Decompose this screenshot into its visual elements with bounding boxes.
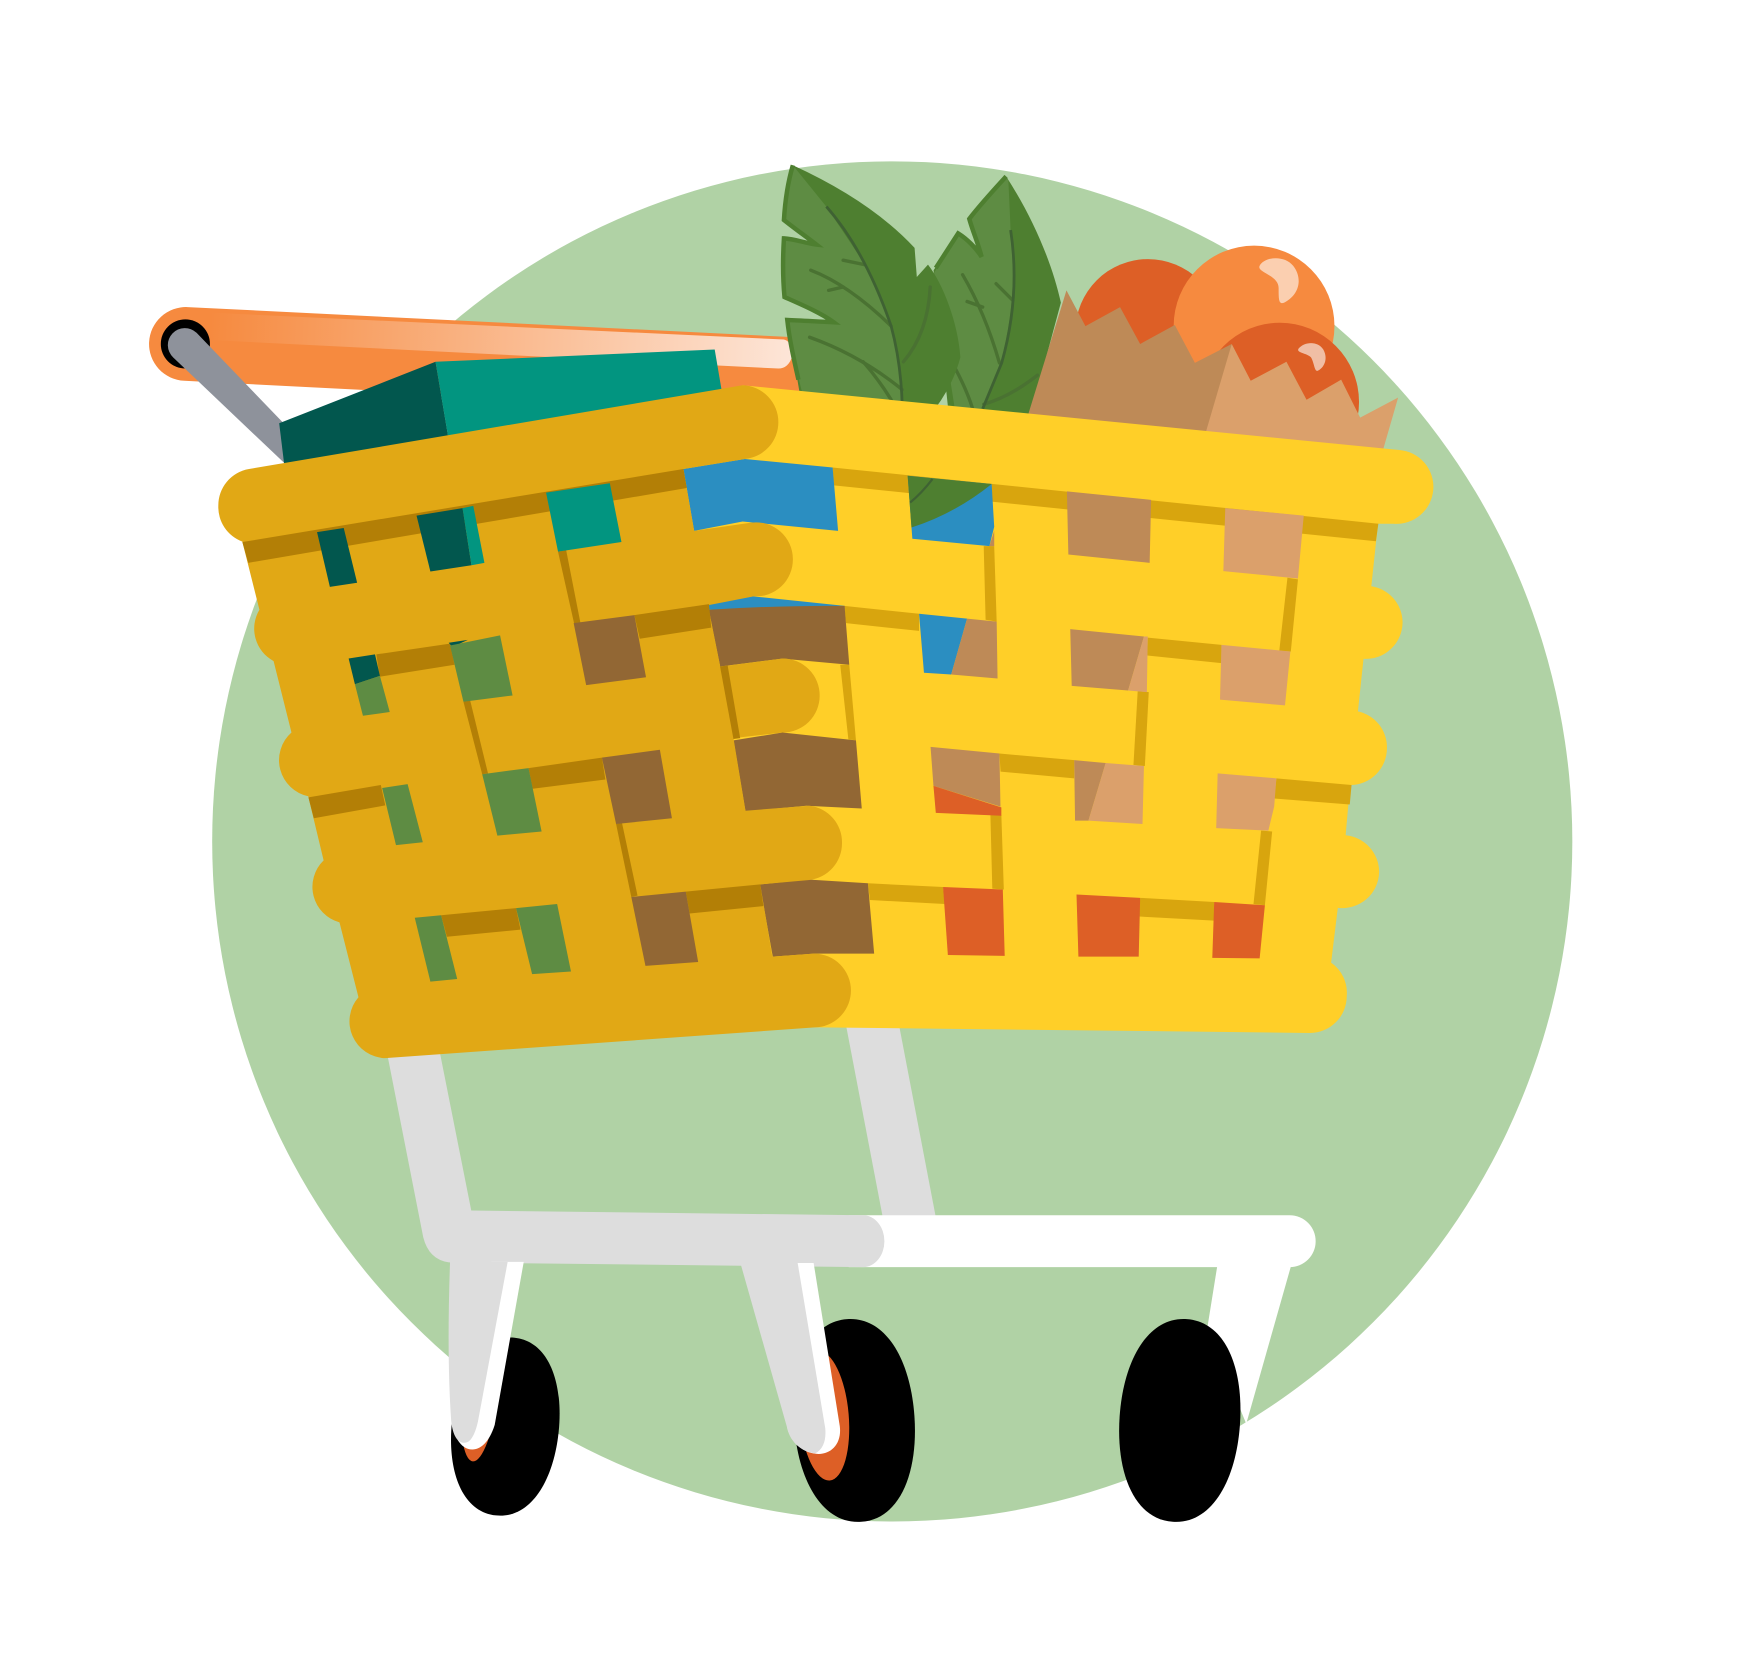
front orange bbox=[1174, 246, 1334, 406]
row three windows bbox=[734, 733, 1276, 831]
background circle bbox=[212, 161, 1572, 1521]
handle hole bbox=[161, 319, 210, 369]
white base bar bbox=[849, 1215, 1316, 1267]
yellow body bbox=[670, 385, 1433, 1033]
fruit and paper bags bbox=[1025, 246, 1398, 481]
row two windows bbox=[708, 596, 1290, 705]
red fruit bbox=[1200, 323, 1359, 481]
red fruit highlight bbox=[1298, 343, 1326, 371]
orange highlight bbox=[1259, 258, 1299, 303]
right white leg bbox=[1207, 1266, 1291, 1424]
left row three windows bbox=[382, 750, 672, 845]
basket windows on right side bbox=[683, 459, 1304, 958]
left row four windows bbox=[415, 892, 698, 982]
right leaf bbox=[934, 176, 1061, 419]
basket right side bbox=[670, 385, 1433, 1033]
basket left side bbox=[218, 385, 851, 1058]
cart back post bbox=[845, 1022, 936, 1217]
wheel middle bbox=[787, 1315, 922, 1526]
blue and leaf window bbox=[908, 476, 994, 546]
middle leg bbox=[740, 1263, 840, 1454]
left row two windows bbox=[349, 615, 646, 716]
wheel right bbox=[1113, 1315, 1247, 1526]
handle highlight bbox=[210, 313, 792, 369]
left leg bbox=[449, 1262, 524, 1449]
left leaf bbox=[783, 165, 960, 419]
book bbox=[279, 350, 724, 469]
gold body bbox=[218, 385, 851, 1058]
blue package window bbox=[683, 459, 838, 531]
right paper bag bbox=[1202, 344, 1398, 463]
row four windows bbox=[760, 880, 1265, 958]
tan windows bbox=[1067, 491, 1151, 563]
darker weave strips bbox=[833, 467, 1378, 921]
leaves bbox=[783, 165, 1061, 419]
wheel left bbox=[443, 1317, 568, 1521]
left paper bag bbox=[1025, 290, 1232, 441]
left row one windows bbox=[317, 483, 621, 587]
back orange bbox=[1075, 259, 1221, 404]
darker weave strips bbox=[242, 469, 763, 937]
grey handle arm bbox=[168, 328, 286, 465]
cart handle bbox=[149, 307, 811, 415]
cart front post and base bbox=[386, 1047, 884, 1267]
